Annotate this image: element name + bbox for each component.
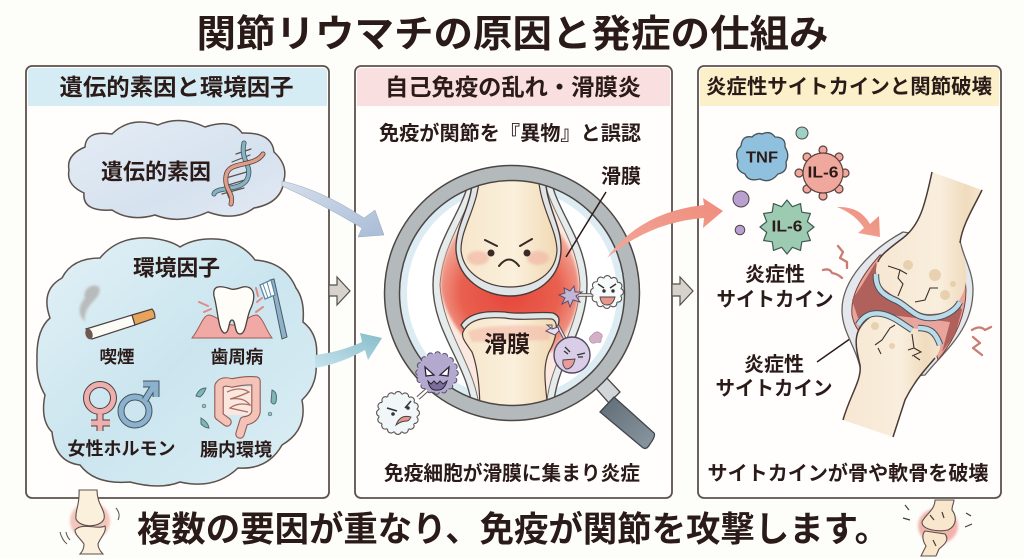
angry bone face [485,239,532,266]
pain marks [823,246,991,355]
panel: inflammatory cytokines and joint destruction [698,66,1001,498]
lower bone [843,316,940,437]
text: immune misrecognition: 免疫が関節を『異物』と誤認 [379,121,641,145]
label: inflammatory cytokines (upper) [716,263,834,311]
icon: gender symbols [86,384,156,431]
purple immune cell [546,325,602,373]
cytokine: TNF [737,133,788,181]
white immune cell attacking [559,278,621,307]
icon: healthy knee [60,490,119,554]
cloud: environmental factors [37,238,317,486]
title: 関節リウマチの原因と発症の仕組み [196,14,828,56]
cytokine: IL-6 green: IL-6 [772,218,803,236]
bone wear spots [871,260,956,349]
panel: genetic and environmental factors [26,66,329,498]
cloud: environmental factors: 環境因子 [133,256,220,280]
panel heading: genetic and environmental factors [28,68,327,106]
icon: intestines and gut bacteria [196,381,276,434]
text: cytokines destroy bone and cartilage: サイトカインが骨や軟骨を破壊 [708,461,988,485]
text: immune cells gather in synovium: 免疫細胞が滑膜に集まり炎症 [384,461,640,485]
label: inflammatory cytokines (upper): サイトカイン [716,289,834,311]
bone cracks [875,266,938,360]
cloud: environmental factors: 歯周病 [211,347,263,367]
label: inflammatory cytokines (lower, with leader line): 炎症性 [744,353,804,376]
arrow: genetic factors to synovitis [282,181,384,237]
lower bone [462,318,556,415]
label: synovium (bone): 滑膜 [484,331,530,357]
label: inflammatory cytokines (lower, with leader line): サイトカイン [716,378,832,400]
icon: tooth and toothbrush [192,279,287,339]
inflamed synovium [852,255,966,360]
inflamed joint [433,165,587,415]
icon: damaged knee [903,500,972,556]
arrow: panel one to panel two [329,277,350,305]
icon: cigarette [80,285,155,340]
cloud: genetic factors: 遺伝的素因 [101,160,211,184]
label: synovium with leader line: 滑膜 [601,165,641,188]
white immune cell, angry [379,390,427,432]
cloud: environmental factors: 女性ホルモン [68,439,176,459]
cytokine: TNF: TNF [746,150,778,166]
magnifying glass with inflamed joint [379,165,654,448]
magnifier handle [593,375,654,448]
arrow: synovitis to cytokines [607,198,723,258]
joint capsule [842,232,973,380]
cloud: environmental factors: 腸内環境 [200,440,272,460]
damaged knee joint [823,172,991,437]
cytokine: IL-6 pink: IL-6 [808,164,839,182]
arrow: environmental factors to synovitis [315,333,382,368]
arrow: panel two to panel three [672,277,693,305]
cloud: environmental factors: 喫煙 [100,347,134,367]
label: synovium with leader line [566,165,641,257]
panel: autoimmunity and synovitis [355,66,672,498]
label: inflammatory cytokines (lower, with leader line) [716,329,864,400]
panel heading: autoimmunity and synovitis: 自己免疫の乱れ・滑膜炎 [385,74,641,100]
magnifier ring [392,173,632,413]
panel heading: genetic and environmental factors: 遺伝的素因と環境因子 [60,74,294,100]
panel heading: autoimmunity and synovitis [357,68,670,106]
dark purple immune cell [418,354,456,392]
damaged cartilage [876,274,960,318]
panel heading: cytokines and joint destruction [700,68,999,106]
cytokine: IL-6 green [760,200,814,254]
icon: DNA helix [214,143,263,204]
cytokine: IL-6 pink [795,146,849,200]
upper bone [876,172,982,314]
panel heading: cytokines and joint destruction: 炎症性サイトカインと関節破壊 [706,76,992,98]
upper bone [455,185,562,297]
label: inflammatory cytokines (upper): 炎症性 [745,263,805,286]
closing message: 複数の要因が重なり、免疫が関節を攻撃します。 [137,510,889,550]
particles [733,127,808,235]
cloud: genetic factors [69,120,285,219]
arrow: cytokines to joint [837,207,880,237]
